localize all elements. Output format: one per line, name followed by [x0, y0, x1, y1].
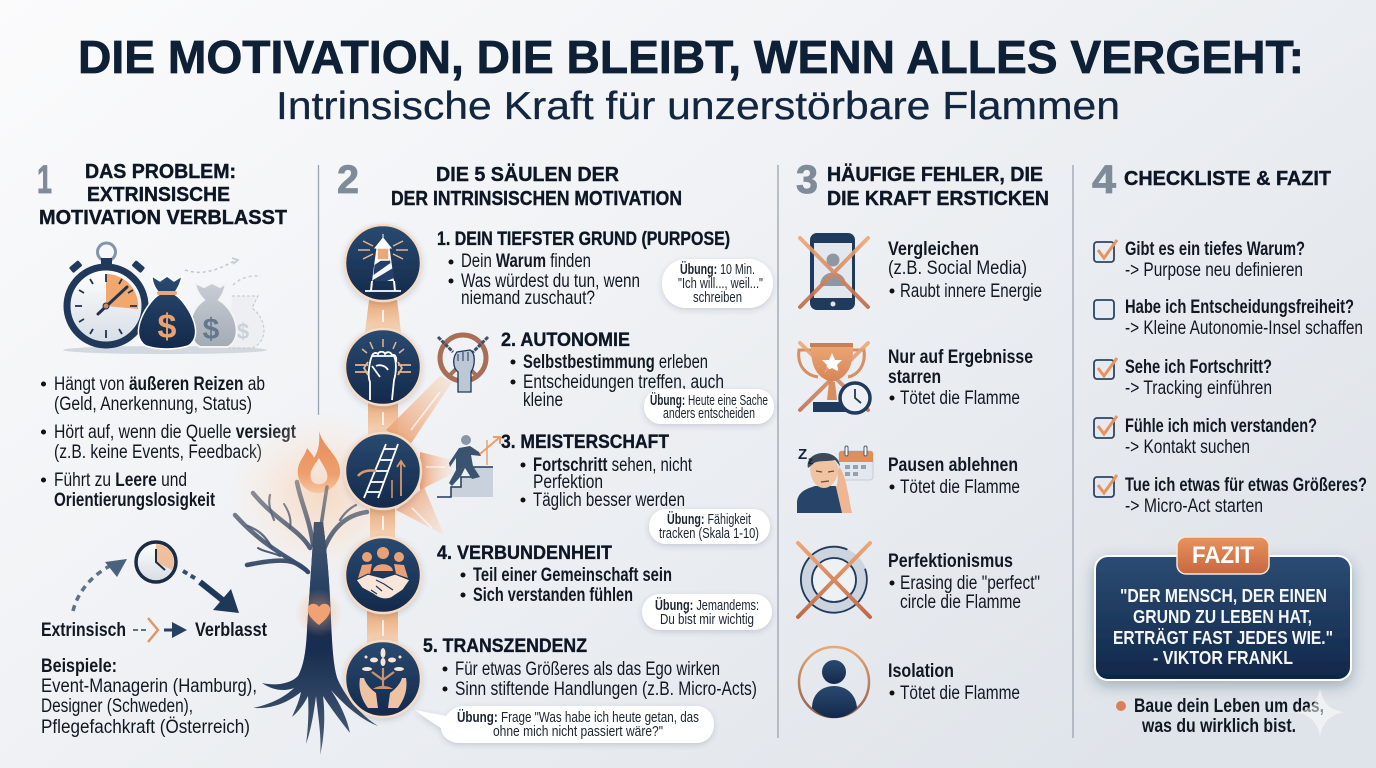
heading: section 2: DIE 5 SÄULEN DER — [436, 163, 620, 186]
callout: uebung 2 — [644, 389, 774, 424]
icon: person climbing stairs — [437, 435, 500, 497]
callout: uebung 2: Übung: Heute eine Sache — [650, 392, 768, 409]
text block: pillar 2 autonomie: 2. AUTONOMIE — [501, 330, 630, 351]
heading: section 3: 3 — [796, 158, 818, 202]
text block: problem bullets: Orientierungslosigkeit — [54, 490, 216, 511]
text block: problem bullets: (Geld, Anerkennung, Status) — [54, 394, 252, 415]
text block: closing line: was du wirklich bist. — [1141, 716, 1296, 737]
callout: uebung 4: Übung: Jemandems: — [655, 597, 759, 614]
text block: vergleichen: (z.B. Social Media) — [888, 258, 1027, 279]
text block: pillar 5 transzendenz: Für etwas Größeres als das Ego wirken — [455, 659, 720, 680]
text block: pillar 1 purpose: Dein Warum finden — [461, 251, 591, 272]
text block: pillar 4 verbundenheit: Teil einer Gemeinschaft sein — [473, 565, 672, 586]
icon: heart — [308, 604, 330, 625]
heading: section 2: 2 — [337, 158, 359, 202]
text block: perfektionismus: Perfektionismus — [888, 551, 1013, 572]
callout: uebung 5 — [415, 706, 714, 743]
text block: ergebnisse: Tötet die Flamme — [900, 388, 1020, 409]
text block: pillar 5 transzendenz: 5. TRANSZENDENZ — [423, 636, 587, 657]
text block: pillar 3 meisterschaft — [501, 432, 693, 511]
text block: pausen: Tötet die Flamme — [900, 477, 1020, 498]
text: extrinsisch to verblasst: Extrinsisch — [41, 620, 126, 641]
checklist item 1: Gibt es ein tiefes Warum? — [1125, 239, 1305, 260]
heading: section 4: 4 — [1092, 158, 1117, 202]
checklist item 4: Fühle ich mich verstanden? — [1125, 416, 1317, 437]
callout: fazit quote box: ERTRÄGT FAST JEDES WIE." — [1113, 627, 1333, 648]
text block: pillar 1 purpose — [437, 229, 730, 309]
panel: checkliste und fazit — [1092, 158, 1367, 737]
illustration: burning tree — [227, 410, 417, 755]
checklist item 3: -> Tracking einführen — [1125, 378, 1272, 399]
callout: uebung 3 — [649, 509, 770, 544]
text block: ergebnisse: Nur auf Ergebnisse — [888, 347, 1033, 368]
text block: pillar 1 purpose: Was würdest du tun, wenn — [461, 271, 640, 292]
icon: tired person and calendar — [797, 446, 873, 513]
subtitle: Intrinsische Kraft für unzerstörbare Flammen — [276, 85, 1120, 128]
text block: isolation: Tötet die Flamme — [900, 683, 1020, 704]
text block: pillar 5 transzendenz: Sinn stiftende Handlungen (z.B. Micro-Acts) — [455, 679, 757, 700]
heading: section 1: 1 — [37, 158, 52, 202]
text block: pillar 4 verbundenheit — [437, 543, 672, 606]
panel: haeufige fehler — [792, 158, 1049, 718]
text block: pillar 2 autonomie: Selbstbestimmung erleben — [523, 352, 708, 373]
callout: uebung 4 — [642, 594, 772, 630]
heading: section 1 — [37, 158, 287, 229]
text block: perfektionismus: circle die Flamme — [900, 592, 1021, 613]
heading: section 1: DAS PROBLEM: — [85, 161, 236, 183]
text block: closing line: Baue dein Leben um das, — [1134, 696, 1324, 717]
heading: section 3: HÄUFIGE FEHLER, DIE — [827, 163, 1043, 186]
callout: uebung 5: ohne mich nicht passiert wäre?" — [493, 724, 663, 740]
pillar circle 3: ladder — [345, 433, 421, 509]
heading: section 3: DIE KRAFT ERSTICKEN — [827, 188, 1049, 210]
text block: vergleichen — [888, 239, 1042, 302]
callout: uebung 4: Du bist mir wichtig — [660, 612, 754, 628]
callout: fazit quote box: GRUND ZU LEBEN HAT, — [1133, 606, 1312, 627]
icon: tired person and calendar: Z — [798, 446, 807, 463]
heading: section 1: EXTRINSISCHE — [87, 184, 230, 206]
connectors and rays between pillars — [365, 300, 452, 645]
text block: beispiele — [41, 656, 257, 738]
icon: stopwatch and fading money bags: $ — [237, 319, 249, 344]
text block: perfektionismus — [888, 551, 1040, 613]
text block: beispiele: Beispiele: — [41, 656, 117, 677]
heading: section 1: MOTIVATION VERBLASST — [39, 207, 287, 229]
text block: pillar 5 transzendenz — [423, 636, 757, 700]
checklist item 3: Sehe ich Fortschritt? — [1125, 357, 1272, 378]
callout: fazit quote box — [1095, 537, 1351, 680]
text block: pillar 4 verbundenheit: 4. VERBUNDENHEIT — [437, 543, 612, 564]
checklist item 4: -> Kontakt suchen — [1125, 437, 1250, 458]
checklist item 2 — [1094, 297, 1363, 339]
callout: fazit quote box: "DER MENSCH, DER EINEN — [1120, 585, 1327, 606]
text block: pillar 3 meisterschaft: 3. MEISTERSCHAFT — [501, 432, 669, 453]
text block: problem bullets: (z.B. keine Events, Feedback) — [54, 442, 262, 463]
text block: pausen: Pausen ablehnen — [888, 455, 1018, 476]
text block: pausen — [888, 455, 1020, 498]
callout: uebung 5: Übung: Frage "Was habe ich heute getan, das — [457, 709, 699, 726]
text block: ergebnisse — [888, 347, 1033, 409]
callout: uebung 1: Übung: 10 Min. — [680, 261, 755, 278]
title — [78, 31, 1304, 128]
panel: das problem — [37, 158, 297, 738]
heading: section 4 — [1092, 158, 1331, 202]
text block: problem bullets: Führt zu Leere und — [54, 470, 187, 491]
text block: problem bullets: Hört auf, wenn die Quelle versiegt — [54, 422, 297, 443]
text block: problem bullets — [41, 374, 297, 511]
icon: isolated person — [799, 647, 869, 718]
icon: stopwatch and fading money bags: $ — [203, 313, 220, 346]
pillar circle 4: handshake — [345, 537, 421, 613]
icon: clock with fading arrows — [73, 542, 239, 613]
icon: crossed-out phone — [800, 233, 868, 310]
pillar circle 2: fist breaking chain — [345, 329, 421, 405]
text block: pillar 3 meisterschaft: Täglich besser werden — [533, 490, 685, 511]
text block: pillar 3 meisterschaft: Perfektion — [533, 472, 603, 493]
callout: uebung 3: Übung: Fähigkeit — [667, 511, 751, 528]
callout: fazit quote box: FAZIT — [1192, 542, 1254, 569]
icon: crossed-out trophy with clock — [799, 343, 870, 413]
text block: beispiele: Event-Managerin (Hamburg), — [41, 676, 257, 697]
callout: uebung 1: schreiben — [693, 290, 742, 306]
callout: uebung 1 — [662, 259, 773, 308]
checklist item 5 — [1094, 475, 1367, 517]
icon: crossed-out perfect circle — [792, 537, 876, 622]
text block: perfektionismus: Erasing die "perfect" — [900, 573, 1040, 594]
title: DIE MOTIVATION, DIE BLEIBT, WENN ALLES VERGEHT: — [78, 31, 1304, 83]
text block: vergleichen: Raubt innere Energie — [900, 281, 1042, 302]
text block: ergebnisse: starren — [888, 367, 941, 388]
text block: pillar 2 autonomie: kleine — [523, 390, 563, 411]
icon: stopwatch and fading money bags: $ — [158, 308, 177, 346]
text block: pillar 2 autonomie: Entscheidungen treffen, auch — [523, 372, 724, 393]
icon: sparkle — [1296, 688, 1344, 736]
checklist item 3 — [1094, 357, 1272, 399]
icon: flame — [298, 431, 340, 493]
text block: problem bullets: Hängt von äußeren Reizen ab — [54, 374, 265, 395]
text: extrinsisch to verblasst: Verblasst — [195, 620, 268, 641]
text block: pillar 2 autonomie — [501, 330, 724, 411]
text block: closing line — [1116, 696, 1324, 737]
heading: section 3 — [796, 158, 1049, 210]
callout: fazit quote box: - VIKTOR FRANKL — [1153, 647, 1293, 668]
text block: isolation — [888, 661, 1020, 704]
text block: isolation: Isolation — [888, 661, 954, 682]
heading: section 2: DER INTRINSISCHEN MOTIVATION — [391, 188, 682, 210]
panel: 5 saeulen — [337, 158, 774, 743]
text block: pillar 3 meisterschaft: Fortschritt sehen, nicht — [533, 455, 693, 476]
callout: uebung 3: tracken (Skala 1-10) — [659, 526, 759, 542]
text block: pillar 4 verbundenheit: Sich verstanden fühlen — [473, 585, 633, 606]
callout: uebung 2: anders entscheiden — [663, 406, 755, 422]
heading: section 4: CHECKLISTE & FAZIT — [1124, 168, 1331, 190]
icon: stopwatch and fading money bags — [63, 243, 267, 354]
checklist item 1 — [1094, 239, 1305, 281]
text block: pillar 1 purpose: 1. DEIN TIEFSTER GRUND (PURPOSE) — [437, 229, 730, 250]
text block: beispiele: Designer (Schweden), — [41, 696, 193, 717]
checklist item 1: -> Purpose neu definieren — [1125, 260, 1303, 281]
checklist item 4 — [1094, 416, 1317, 458]
text: extrinsisch to verblasst — [41, 618, 268, 642]
icon: tired person and calendar: z — [808, 456, 813, 467]
text block: pillar 1 purpose: niemand zuschaut? — [461, 288, 595, 309]
checklist item 5: -> Micro-Act starten — [1125, 496, 1263, 517]
callout: uebung 1: "Ich will..., weil..." — [678, 276, 763, 292]
pillar circle 5: tree in hands — [345, 641, 421, 717]
heading: section 2 — [337, 158, 682, 210]
text block: vergleichen: Vergleichen — [888, 239, 979, 260]
pillar circle 1: lighthouse — [345, 225, 421, 301]
text block: beispiele: Pflegefachkraft (Österreich) — [41, 717, 250, 738]
icon: broken chain fist — [438, 335, 488, 392]
